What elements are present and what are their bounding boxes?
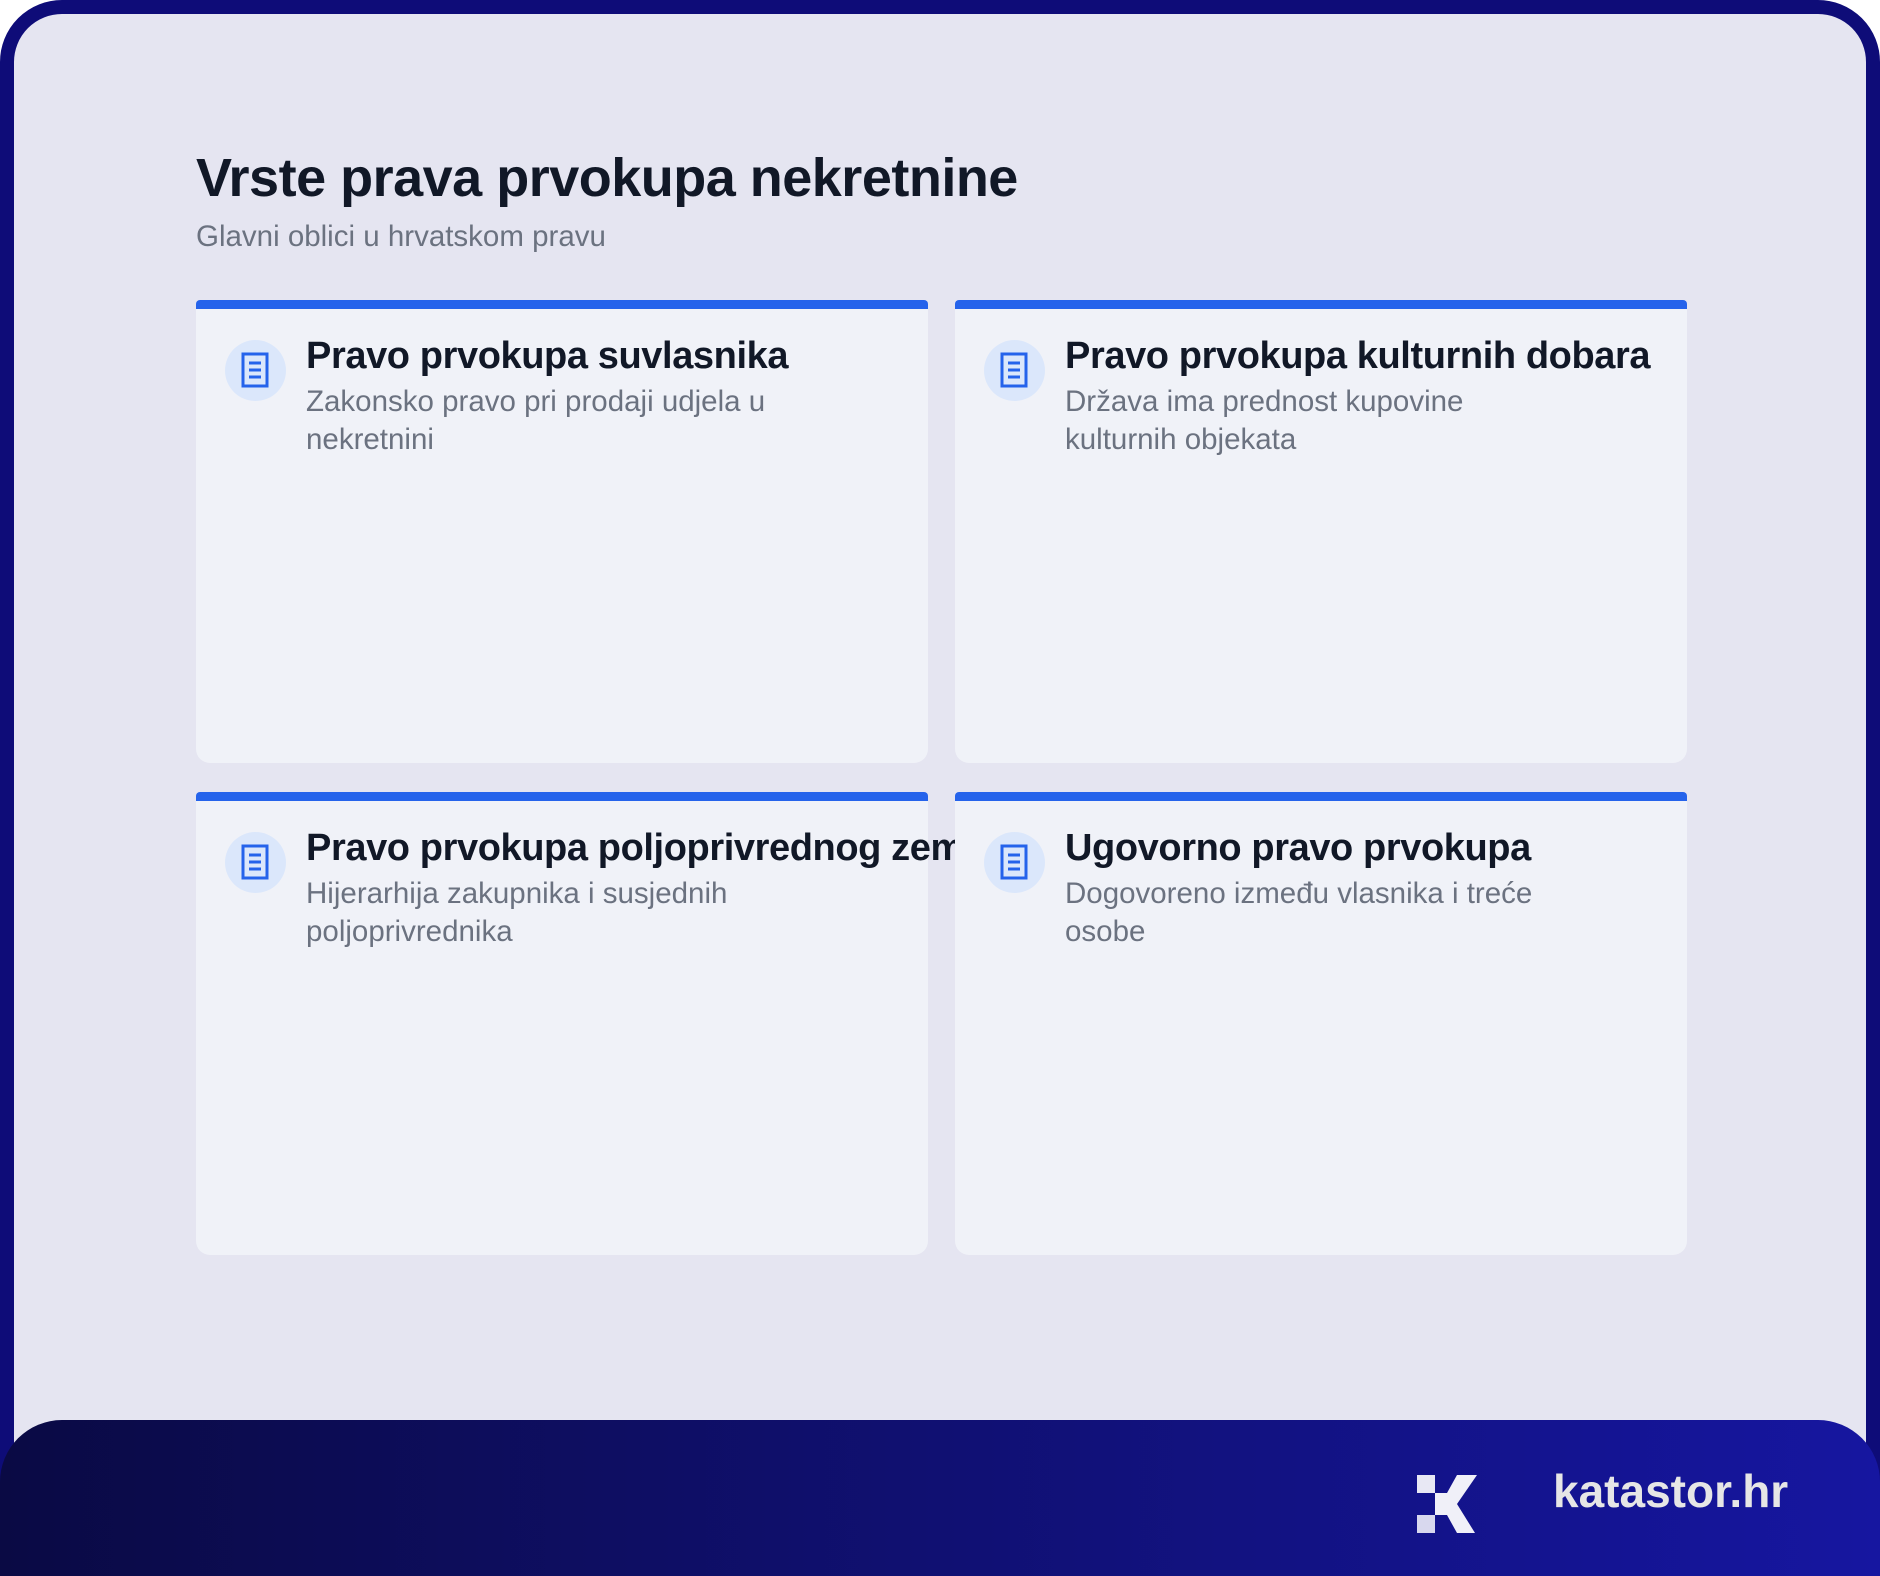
title: Vrste prava prvokupa nekretnine <box>196 148 1018 208</box>
panel: kulturna dobra <box>955 300 1687 763</box>
footer <box>0 1420 1880 1576</box>
panel: suvlasnik <box>196 300 928 763</box>
description: Država ima prednost kupovine kulturnih objekata <box>1065 385 1463 456</box>
subtitle: Glavni oblici u hrvatskom pravu <box>196 220 606 253</box>
heading: Ugovorno pravo prvokupa <box>1065 827 1531 869</box>
heading: Pravo prvokupa suvlasnika <box>306 335 788 377</box>
description: Dogovoreno između vlasnika i treće osobe <box>1065 877 1532 948</box>
description: Zakonsko pravo pri prodaji udjela u nekretnini <box>306 385 765 456</box>
icon: document <box>984 340 1045 401</box>
description: Hijerarhija zakupnika i susjednih poljoprivrednika <box>306 877 727 948</box>
panel: poljoprivredno zemljište <box>196 792 928 1255</box>
heading: Pravo prvokupa poljoprivrednog zemljišta <box>306 827 1048 869</box>
brand text: katastor.hr <box>1553 1465 1788 1517</box>
icon: document <box>225 340 286 401</box>
icon: logo K <box>1417 1475 1477 1533</box>
icon: document <box>225 832 286 893</box>
heading: Pravo prvokupa kulturnih dobara <box>1065 335 1650 377</box>
icon: document <box>984 832 1045 893</box>
panel: ugovorno <box>955 792 1687 1255</box>
